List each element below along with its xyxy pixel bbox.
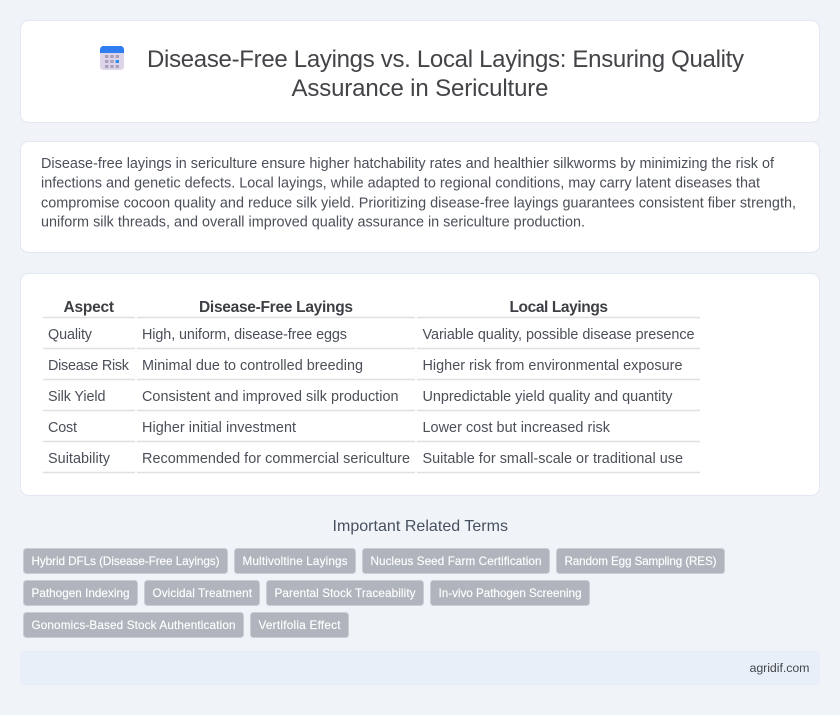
footer text: agridif.com (750, 661, 810, 675)
tag: Gonomics-Based Stock Authentication (32, 619, 236, 632)
icon: calendar (100, 46, 124, 70)
table row: silk yield: Silk Yield (48, 389, 106, 405)
tag: Hybrid DFLs (Disease-Free Layings) (32, 555, 220, 568)
tag: Random Egg Sampling (RES) (564, 555, 717, 568)
table row: cost (48, 420, 611, 436)
tag: Multivoltine Layings (242, 555, 348, 568)
panel: description (20, 142, 820, 252)
table header: Local Layings (510, 299, 608, 316)
tag: Pathogen Indexing (32, 587, 130, 600)
table row: quality (48, 327, 694, 343)
tag (556, 548, 724, 574)
heading: important related terms: Important Related Terms (332, 518, 508, 535)
text block: description paragraph: uniform silk threads, and overall improved quality assurance in sericulture production. (41, 214, 585, 230)
table row: quality: High, uniform, disease-free eggs (142, 327, 347, 343)
tag: Nucleus Seed Farm Certification (370, 555, 542, 568)
table row: cost: Lower cost but increased risk (422, 420, 611, 436)
table row: suitability: Suitable for small-scale or traditional use (422, 451, 683, 467)
table header: Disease-Free Layings (199, 299, 353, 316)
table row: disease risk: Disease Risk (48, 358, 130, 374)
table header: Aspect (64, 299, 114, 316)
panel: title header (20, 20, 820, 122)
tag (362, 548, 550, 574)
table header (64, 299, 608, 316)
text block: description paragraph (41, 156, 796, 230)
tag (234, 548, 356, 574)
table row: quality: Variable quality, possible disease presence (422, 327, 694, 343)
text block: description paragraph: compromise cocoon quality and reduce silk yield. Prioritizing disease-free layings guarantees consistent fiber strength, (41, 196, 796, 212)
table row: cost: Higher initial investment (142, 420, 296, 436)
text block: description paragraph: Disease-free layings in sericulture ensure higher hatchability rates and healthier silkworms by minimizing the risk of (41, 156, 775, 172)
title (147, 46, 744, 102)
tag: Ovicidal Treatment (152, 587, 253, 600)
tag: Parental Stock Traceability (274, 587, 416, 600)
tag: In-vivo Pathogen Screening (438, 587, 582, 600)
title: Disease-Free Layings vs. Local Layings: Ensuring Quality (147, 46, 744, 73)
table row: suitability (48, 451, 683, 467)
tag list (24, 548, 724, 638)
tag (266, 580, 424, 606)
tag (430, 580, 590, 606)
table row: silk yield (48, 389, 673, 405)
tag: Vertifolia Effect (258, 619, 341, 632)
panel: comparison table (20, 274, 820, 496)
table row: quality: Quality (48, 327, 93, 343)
text block: description paragraph: infections and genetic defects. Local layings, while adapted to regional conditions, may carry latent diseases that (41, 176, 760, 192)
title: Assurance in Sericulture (292, 75, 548, 102)
table row: silk yield: Consistent and improved silk production (142, 389, 398, 405)
footer bar (20, 651, 820, 685)
table row: cost: Cost (48, 420, 77, 436)
table row: disease risk (48, 358, 682, 374)
tag (144, 580, 260, 606)
table row: disease risk: Higher risk from environmental exposure (422, 358, 682, 374)
table row: silk yield: Unpredictable yield quality and quantity (422, 389, 673, 405)
table row: suitability: Recommended for commercial sericulture (142, 451, 410, 467)
tag (250, 612, 348, 638)
tag (24, 580, 138, 606)
table row: disease risk: Minimal due to controlled breeding (142, 358, 363, 374)
table row: suitability: Suitability (48, 451, 111, 467)
tag (24, 548, 228, 574)
tag (24, 612, 244, 638)
